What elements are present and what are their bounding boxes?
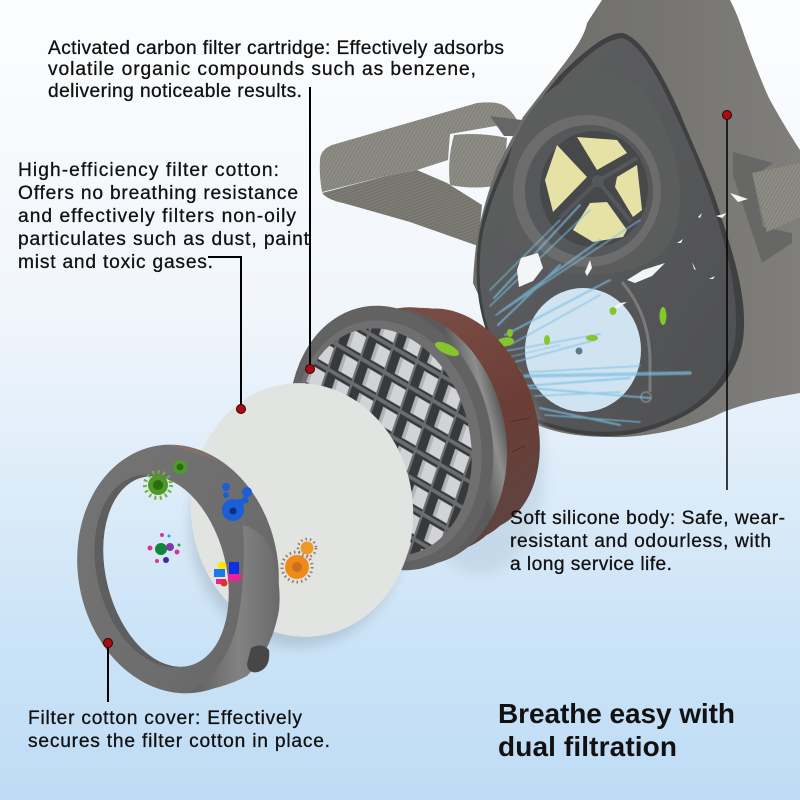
ring top tint	[168, 445, 220, 462]
text block: activated carbon filter cartridge: delivering noticeable results.	[48, 81, 302, 102]
callout: filter cotton leader line	[208, 257, 246, 414]
callout: cover leader line	[104, 638, 112, 702]
panel: white filter cotton disc	[178, 372, 426, 648]
mask body	[473, 0, 800, 437]
cartridge grey rim	[277, 287, 533, 587]
ring inner wall shading	[94, 474, 178, 667]
text block: high-efficiency filter cotton: mist and toxic gases.	[18, 252, 213, 273]
text block: filter cotton cover: secures the filter cotton in place.	[28, 731, 330, 752]
callout: carbon cartridge leader line	[306, 87, 314, 374]
text block: high-efficiency filter cotton: and effectively filters non-oily	[18, 206, 296, 227]
heading: breathe easy	[498, 698, 735, 762]
cartridge grid	[306, 328, 472, 555]
heading: breathe easy: Breathe easy with	[498, 698, 735, 729]
text block: activated carbon filter cartridge: Activated carbon filter cartridge: Effectively adsorbs	[48, 38, 504, 59]
text block: soft silicone body: Soft silicone body: Safe, wear-	[510, 508, 785, 529]
mask inner panel	[477, 33, 744, 436]
heading: breathe easy: dual filtration	[498, 731, 677, 762]
icon: ring tab	[247, 645, 269, 672]
text block: high-efficiency filter cotton	[18, 160, 310, 273]
icon: blue germ	[222, 483, 252, 521]
icon: multicolour germ	[148, 533, 180, 563]
icon: bright pixel germ	[214, 562, 241, 586]
cartridge brown rear body	[302, 284, 570, 576]
text block: high-efficiency filter cotton: Offers no breathing resistance	[18, 183, 298, 204]
text block: activated carbon filter cartridge: volatile organic compounds such as benzene,	[48, 59, 476, 80]
panel: mask assembly	[320, 0, 800, 437]
text block: activated carbon filter cartridge	[48, 38, 504, 102]
text block: soft silicone body: resistant and odourless, with	[510, 531, 771, 552]
icon: green leaf on rim	[433, 339, 461, 359]
icon: orange germ small	[298, 539, 316, 557]
icon: right head strap	[752, 163, 800, 232]
icon: orange germ large	[282, 552, 312, 582]
icon: air inlet port with yellow filter	[513, 115, 661, 267]
text block: filter cotton cover	[28, 708, 330, 752]
icon: left head strap	[320, 102, 522, 246]
ring front face	[77, 444, 279, 694]
icon: inner light blue disc	[525, 288, 641, 412]
icon: green germ large	[145, 472, 171, 498]
text block: soft silicone body	[510, 508, 785, 575]
icon: white debris flakes	[517, 193, 748, 308]
icon: right strap buckle	[733, 152, 792, 263]
icon: green particles	[495, 307, 666, 387]
text block: high-efficiency filter cotton: particulates such as dust, paint	[18, 229, 310, 250]
text block: high-efficiency filter cotton: High-efficiency filter cotton:	[18, 160, 279, 181]
icon: blue airflow streaks	[490, 205, 690, 425]
panel: filter cotton cover ring	[77, 444, 280, 694]
text block: soft silicone body: a long service life.	[510, 554, 672, 575]
panel: activated carbon cartridge	[292, 306, 546, 574]
callout: silicone body leader line	[722, 110, 732, 490]
text block: filter cotton cover: Filter cotton cover: Effectively	[28, 708, 302, 729]
icon: brown streaks	[510, 418, 530, 452]
icon: green germ small	[173, 460, 187, 474]
ring side highlight	[190, 525, 280, 692]
